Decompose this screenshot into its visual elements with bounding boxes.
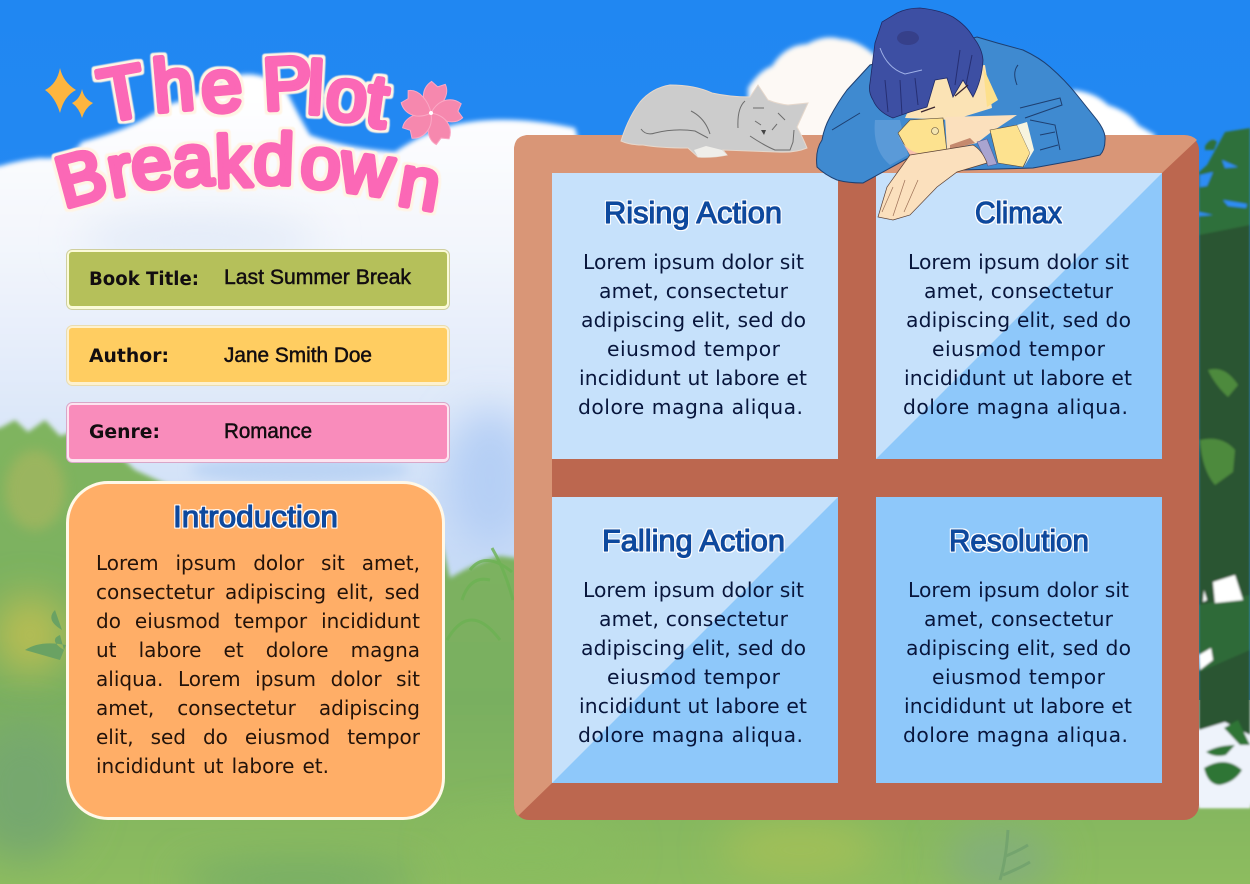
text: introduction body: Lorem ipsum dolor sit amet, xyxy=(96,551,420,575)
panel: rising action xyxy=(552,173,838,459)
title: ThePlot xyxy=(92,41,394,144)
panel: falling action: incididunt ut labore et xyxy=(579,694,807,718)
illustration: sleeping cat xyxy=(621,85,808,157)
hand xyxy=(878,145,987,220)
text: introduction body: consectetur adipiscing elit, sed xyxy=(96,580,420,604)
panel: rising action: amet, consectetur xyxy=(599,279,789,303)
panel: falling action xyxy=(552,497,838,783)
panel: introduction xyxy=(66,481,445,820)
info row: genre: Romance xyxy=(224,419,312,443)
info row: author: Jane Smith Doe xyxy=(224,343,372,367)
face xyxy=(905,65,992,120)
text: introduction body: amet, consectetur adipiscing xyxy=(96,696,420,720)
info row: author: Author: xyxy=(89,346,169,367)
forearm xyxy=(945,115,1017,150)
title: Breakdown xyxy=(47,119,447,227)
panel: resolution: Lorem ipsum dolor sit xyxy=(908,578,1129,602)
illustration: sleeping boy xyxy=(817,8,1105,220)
icon: sparkles xyxy=(45,68,93,118)
panel: falling action: eiusmod tempor xyxy=(607,665,781,689)
text: introduction body: aliqua. Lorem ipsum dolor sit xyxy=(96,667,420,691)
background: grass and bushes xyxy=(0,420,1250,884)
info row: genre xyxy=(66,402,450,462)
panel: falling action: amet, consectetur xyxy=(599,607,789,631)
text: introduction body xyxy=(96,551,420,778)
info row: book title: Book Title: xyxy=(89,269,199,290)
panel: falling action: Falling Action xyxy=(602,523,785,558)
panel: falling action: adipiscing elit, sed do xyxy=(581,636,806,660)
panel: rising action: Rising Action xyxy=(604,195,782,230)
panel: rising action: eiusmod tempor xyxy=(607,337,781,361)
panel: climax xyxy=(876,173,1162,459)
cuffs xyxy=(898,118,947,155)
panel: climax: amet, consectetur xyxy=(924,279,1114,303)
info row: author xyxy=(66,326,450,386)
info row: genre: Genre: xyxy=(89,422,160,443)
icon: cherry blossom xyxy=(398,80,463,146)
panel: climax: Lorem ipsum dolor sit xyxy=(908,250,1129,274)
eyes xyxy=(921,85,968,112)
heading: introduction: Introduction xyxy=(173,499,338,534)
watch xyxy=(977,139,997,166)
window frame xyxy=(514,135,1199,820)
info row: book title xyxy=(66,250,450,310)
sweater xyxy=(817,37,1105,183)
panel: resolution: incididunt ut labore et xyxy=(904,694,1132,718)
panel: climax: eiusmod tempor xyxy=(932,337,1106,361)
panel: rising action: Lorem ipsum dolor sit xyxy=(583,250,804,274)
panel: falling action: Lorem ipsum dolor sit xyxy=(583,578,804,602)
panel: falling action: dolore magna aliqua. xyxy=(578,723,803,747)
panel: climax: adipiscing elit, sed do xyxy=(906,308,1131,332)
panel: resolution: dolore magna aliqua. xyxy=(903,723,1128,747)
text: introduction body: elit, sed do eiusmod tempor xyxy=(96,725,420,749)
panel: climax: dolore magna aliqua. xyxy=(903,395,1128,419)
text: introduction body: incididunt ut labore et. xyxy=(96,754,329,778)
panel: rising action: incididunt ut labore et xyxy=(579,366,807,390)
info row: book title: Last Summer Break xyxy=(224,265,411,289)
background: tree xyxy=(1199,128,1250,808)
title xyxy=(47,41,447,227)
panel: climax: Climax xyxy=(975,195,1062,230)
panel: resolution: eiusmod tempor xyxy=(932,665,1106,689)
text: introduction body: do eiusmod tempor incididunt xyxy=(96,609,420,633)
panel: resolution: amet, consectetur xyxy=(924,607,1114,631)
panel: rising action: dolore magna aliqua. xyxy=(578,395,803,419)
text: introduction body: ut labore et dolore magna xyxy=(96,638,420,662)
panel: rising action: adipiscing elit, sed do xyxy=(581,308,806,332)
panel: resolution xyxy=(876,497,1162,783)
panel: resolution: adipiscing elit, sed do xyxy=(906,636,1131,660)
panel: resolution: Resolution xyxy=(949,523,1089,558)
panel: climax: incididunt ut labore et xyxy=(904,366,1132,390)
hair xyxy=(869,8,983,118)
